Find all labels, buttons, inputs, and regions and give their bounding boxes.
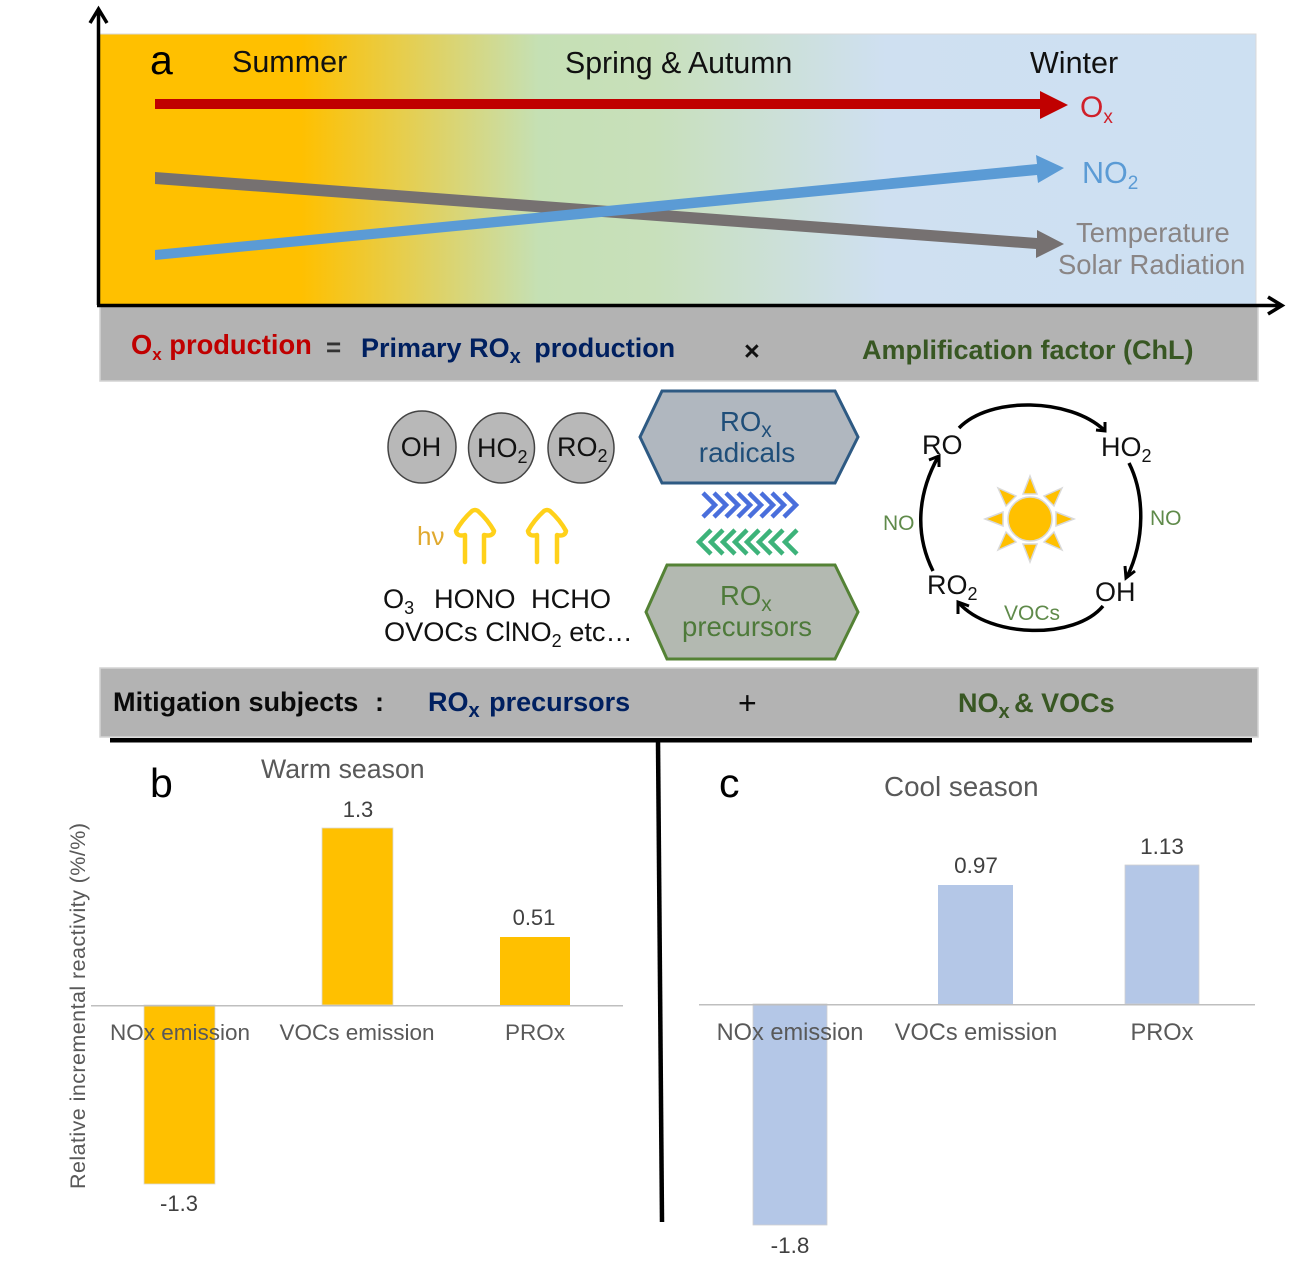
icon: sun bbox=[985, 476, 1074, 562]
colon: : bbox=[375, 687, 384, 717]
precursor species list: 3 bbox=[404, 598, 414, 618]
hexagon: ROx precursors bbox=[646, 565, 858, 659]
arrow: NO2 bbox=[155, 155, 1064, 260]
panel letter b: b bbox=[150, 760, 173, 806]
circle: HO2: HO bbox=[477, 433, 518, 463]
category labels: NOx emission bbox=[717, 1020, 863, 1046]
cycle arrow: OH to RO2 bbox=[958, 602, 1103, 630]
label: h nu: hν bbox=[417, 521, 444, 551]
radical cycle diagram bbox=[883, 405, 1182, 630]
category labels: PROx bbox=[505, 1020, 566, 1045]
label: Ox: O bbox=[1080, 91, 1103, 124]
term: primary ROx production: production bbox=[527, 333, 675, 363]
label: temperature and solar radiation: Solar Radiation bbox=[1058, 249, 1245, 280]
season label: winter: Winter bbox=[1030, 46, 1118, 80]
label: temperature and solar radiation: Temperature bbox=[1076, 217, 1230, 248]
icon: photolysis arrow 1 bbox=[456, 510, 494, 562]
label: Ox: x bbox=[1103, 107, 1113, 128]
circle: OH: OH bbox=[401, 432, 441, 462]
y axis title: Relative incremental reactivity (%/%) bbox=[66, 823, 90, 1189]
term: Ox production: production bbox=[162, 329, 312, 360]
term: primary ROx production: x bbox=[510, 346, 521, 368]
label: NO2: NO bbox=[1082, 156, 1128, 190]
precursor species list: 2 bbox=[552, 631, 562, 651]
hexagon: ROx precursors: precursors bbox=[682, 611, 812, 642]
category labels bbox=[110, 1020, 566, 1045]
precursor species list: HONO bbox=[434, 583, 516, 614]
panel letter c: c bbox=[719, 760, 740, 806]
band: mitigation subjects bbox=[100, 668, 1258, 737]
value labels: 0.97 bbox=[954, 853, 998, 878]
baseline bbox=[699, 1004, 1255, 1006]
hexagon: ROx radicals: x bbox=[761, 419, 772, 442]
cycle arrow: RO to HO2 bbox=[959, 405, 1105, 431]
hexagon: ROx radicals bbox=[640, 391, 858, 483]
term: ROx precursors: RO bbox=[428, 687, 468, 717]
y axis arrow bbox=[90, 9, 107, 305]
seasonal gradient background bbox=[99, 34, 1256, 305]
bar NOx bbox=[753, 1004, 827, 1225]
circle: RO2: 2 bbox=[598, 446, 608, 466]
category labels: VOCs emission bbox=[279, 1020, 435, 1045]
arrow: Ox bbox=[155, 91, 1068, 119]
hexagon: ROx radicals: radicals bbox=[699, 437, 795, 468]
chart title: Warm season bbox=[261, 754, 425, 784]
category labels bbox=[717, 1020, 1194, 1046]
term: primary ROx production: Primary RO bbox=[361, 333, 510, 363]
cycle arrow: RO2 to RO bbox=[921, 456, 939, 571]
label: NO right: NO bbox=[1150, 507, 1182, 530]
category labels: VOCs emission bbox=[895, 1020, 1057, 1046]
chevrons: blue forward bbox=[703, 493, 796, 517]
chart c: cool season bbox=[699, 760, 1255, 1258]
value labels: 0.51 bbox=[513, 905, 555, 930]
precursor species list: HCHO bbox=[531, 583, 611, 614]
term: NOx and VOCs: NO bbox=[958, 688, 998, 718]
term: ROx precursors: precursors bbox=[482, 687, 630, 717]
icon: photolysis arrow 2 bbox=[528, 510, 566, 562]
circle: RO2: RO bbox=[557, 432, 598, 462]
label: temperature and solar radiation bbox=[1058, 217, 1245, 280]
hexagon: ROx radicals: RO bbox=[720, 406, 761, 437]
circle: OH bbox=[388, 411, 456, 483]
bar PROx bbox=[1125, 865, 1199, 1004]
term: NOx and VOCs: & VOCs bbox=[1007, 688, 1115, 718]
bar PROx bbox=[500, 937, 570, 1005]
term: ROx precursors: x bbox=[468, 700, 480, 722]
equals sign: = bbox=[326, 332, 341, 362]
circle: HO2: 2 bbox=[518, 447, 528, 467]
season label: summer: Summer bbox=[232, 45, 347, 79]
arrow: temperature and solar radiation bbox=[155, 172, 1064, 258]
chart b: warm season bbox=[66, 754, 623, 1216]
precursor species list: O bbox=[383, 583, 404, 614]
precursor species list: OVOCs ClNO bbox=[384, 616, 552, 647]
hexagon: ROx precursors: x bbox=[761, 593, 772, 616]
circle: HO2 bbox=[468, 413, 534, 483]
divider vertical bbox=[658, 741, 662, 1222]
category labels: PROx bbox=[1131, 1020, 1194, 1046]
value labels: 1.3 bbox=[343, 797, 373, 822]
value labels bbox=[771, 834, 1184, 1258]
panel a: seasonal trends bbox=[90, 9, 1256, 305]
category labels: NOx emission bbox=[110, 1020, 250, 1045]
label: NO left: NO bbox=[883, 512, 914, 535]
label: VOCs: VOCs bbox=[1004, 602, 1060, 625]
value labels: 1.13 bbox=[1140, 834, 1184, 859]
precursor species list bbox=[383, 583, 633, 651]
x axis arrow bbox=[97, 297, 1282, 314]
multiply sign: × bbox=[744, 336, 760, 366]
bar NOx bbox=[144, 1005, 215, 1184]
term: amplification factor: Amplification factor (ChL) bbox=[862, 335, 1194, 365]
value labels: -1.3 bbox=[160, 1191, 198, 1216]
chevrons: green backward bbox=[699, 530, 797, 554]
species: RO: RO bbox=[922, 430, 962, 460]
species: RO2: RO bbox=[927, 570, 968, 600]
label: mitigation subjects: Mitigation subjects bbox=[113, 686, 358, 717]
plus sign: + bbox=[738, 685, 757, 721]
panel letter a: a bbox=[150, 37, 173, 83]
chart title: Cool season bbox=[884, 771, 1039, 802]
band: Ox production equation bbox=[100, 306, 1258, 381]
value labels bbox=[160, 797, 555, 1216]
baseline bbox=[91, 1005, 623, 1006]
term: NOx and VOCs: x bbox=[998, 701, 1010, 723]
species: RO2: 2 bbox=[968, 584, 978, 604]
label: NO2: 2 bbox=[1128, 173, 1138, 194]
term: Ox production: O bbox=[131, 329, 152, 360]
cycle arrow: HO2 to OH bbox=[1125, 463, 1141, 578]
divider horizontal bbox=[110, 738, 1252, 742]
circle: RO2 bbox=[548, 413, 614, 483]
value labels: -1.8 bbox=[771, 1233, 809, 1258]
species: HO2: HO bbox=[1101, 432, 1142, 462]
bar VOCs bbox=[938, 885, 1013, 1004]
bar VOCs bbox=[322, 828, 393, 1005]
term: Ox production: x bbox=[152, 345, 162, 364]
species: HO2: 2 bbox=[1142, 446, 1152, 466]
species: OH: OH bbox=[1095, 577, 1136, 607]
season label: spring and autumn: Spring & Autumn bbox=[565, 47, 792, 80]
hexagon: ROx precursors: RO bbox=[720, 580, 761, 611]
radical circles bbox=[388, 411, 614, 483]
precursor species list: etc… bbox=[562, 616, 633, 647]
